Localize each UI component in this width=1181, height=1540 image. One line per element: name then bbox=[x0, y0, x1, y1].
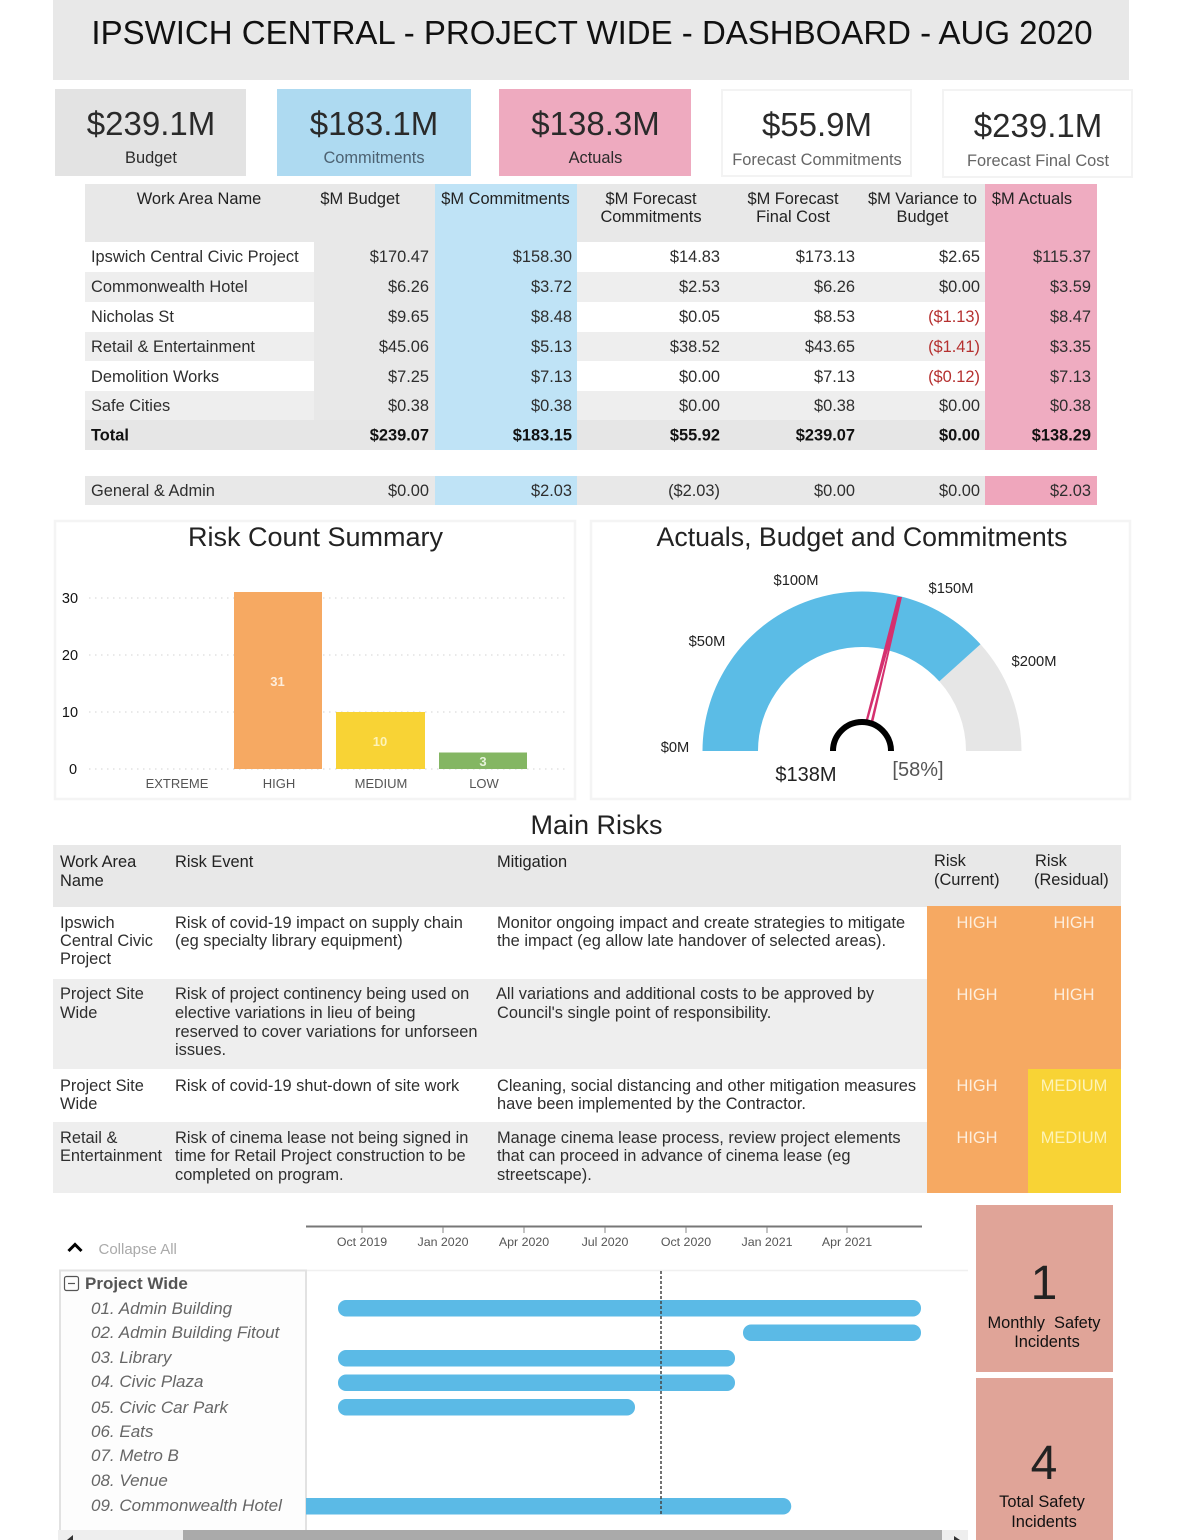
gantt task list: 08. Venue bbox=[91, 1471, 168, 1490]
panel: risk count summary bbox=[55, 521, 575, 799]
row: Ipswich Central Civic Project: $170.47 bbox=[370, 248, 429, 266]
gantt task list: Project Wide bbox=[85, 1274, 188, 1293]
KPI: actuals: $138.3M bbox=[531, 105, 660, 142]
safety tile: monthly incidents: Monthly Safety bbox=[988, 1314, 1101, 1332]
gantt task list: 09. Commonwealth Hotel bbox=[91, 1496, 283, 1515]
risk row 1 bbox=[60, 914, 1094, 968]
risk row 4 bbox=[60, 1129, 1107, 1184]
table header row: $M Actuals bbox=[992, 190, 1072, 208]
today marker bbox=[660, 1271, 662, 1516]
row: General and Admin: $2.03 bbox=[531, 482, 572, 500]
KPI: budget bbox=[55, 89, 246, 176]
row: Ipswich Central Civic Project bbox=[91, 248, 1091, 266]
row: Commonwealth Hotel: $3.59 bbox=[1050, 278, 1091, 296]
risk row 3: Risk of covid-19 shut-down of site work bbox=[175, 1077, 460, 1095]
row: Nicholas St: $0.05 bbox=[679, 308, 720, 326]
row: Commonwealth Hotel: $0.00 bbox=[939, 278, 980, 296]
row: Commonwealth Hotel: $3.72 bbox=[531, 278, 572, 296]
KPI: forecast final cost bbox=[943, 90, 1132, 177]
row: General and Admin bbox=[91, 482, 1091, 500]
row: Total: $239.07 bbox=[370, 426, 429, 444]
row: Total: Total bbox=[91, 426, 129, 444]
title banner: IPSWICH CENTRAL - PROJECT WIDE - DASHBOARD - AUG 2020 bbox=[91, 14, 1093, 51]
gantt timeline axis bbox=[306, 1226, 922, 1249]
risk row 1: HIGH bbox=[1054, 914, 1094, 932]
gantt timeline axis: Jan 2020 bbox=[418, 1235, 469, 1249]
table header row: Work Area Name bbox=[137, 190, 261, 208]
row: Retail and Entertainment: $3.35 bbox=[1050, 338, 1091, 356]
bar: high 31: 31 bbox=[270, 674, 285, 689]
risk row 2: Wide bbox=[60, 1004, 97, 1022]
cost table bbox=[85, 184, 1097, 505]
row: Total: $55.92 bbox=[670, 426, 720, 444]
gauge value: $138M bbox=[775, 764, 837, 786]
row: Commonwealth Hotel: $6.26 bbox=[814, 278, 855, 296]
row: General and Admin: $0.00 bbox=[814, 482, 855, 500]
risk row 4: HIGH bbox=[957, 1129, 997, 1147]
gantt task list: 02. Admin Building Fitout bbox=[91, 1323, 281, 1342]
risk row 4: time for Retail Project construction to be bbox=[175, 1147, 466, 1165]
y axis labels: 20 bbox=[62, 648, 78, 664]
risk row 1: Project bbox=[60, 950, 111, 968]
table header row: Budget bbox=[897, 208, 949, 226]
row: Total bbox=[91, 426, 1091, 444]
table header row: Final Cost bbox=[756, 208, 830, 226]
risk table header: (Current) bbox=[934, 871, 1000, 889]
row: Retail and Entertainment: Retail & Entertainment bbox=[91, 338, 255, 356]
KPI: forecast commitments: Forecast Commitments bbox=[732, 151, 902, 169]
risk row 3: Cleaning, social distancing and other mitigation measures bbox=[497, 1077, 916, 1095]
row: Retail and Entertainment: $45.06 bbox=[379, 338, 429, 356]
risk row 3: Project Site bbox=[60, 1077, 144, 1095]
row: Retail and Entertainment: ($1.41) bbox=[928, 338, 980, 356]
KPI: forecast final cost: $239.1M bbox=[974, 107, 1102, 144]
table header row: $M Budget bbox=[320, 190, 400, 208]
safety tile: monthly incidents bbox=[976, 1205, 1113, 1372]
category labels: MEDIUM bbox=[355, 776, 407, 791]
gantt chart bbox=[58, 1226, 968, 1540]
gantt timeline axis: Apr 2021 bbox=[822, 1235, 872, 1249]
row: Retail and Entertainment: $38.52 bbox=[670, 338, 720, 356]
bar: medium 10: 10 bbox=[373, 734, 387, 749]
table header row: $M Commitments bbox=[441, 190, 570, 208]
heading: gauge: Actuals, Budget and Commitments bbox=[657, 522, 1067, 552]
icon: minus box bbox=[64, 1276, 78, 1290]
risk row 2: HIGH bbox=[1054, 986, 1094, 1004]
KPI: actuals: Actuals bbox=[569, 149, 622, 167]
row: Demolition Works bbox=[91, 368, 1091, 386]
risk row 1: Monitor ongoing impact and create strategies to mitigate bbox=[497, 914, 905, 932]
risk row 2: HIGH bbox=[957, 986, 997, 1004]
risk row 1: (eg specialty library equipment) bbox=[175, 932, 403, 950]
risk table header: Risk bbox=[934, 852, 967, 870]
gauge scale labels: $100M bbox=[774, 573, 818, 589]
row: Commonwealth Hotel: Commonwealth Hotel bbox=[91, 278, 248, 296]
bar: low 3 bbox=[439, 752, 527, 769]
heading: risk count summary: Risk Count Summary bbox=[188, 522, 444, 552]
row: Nicholas St: ($1.13) bbox=[928, 308, 980, 326]
category labels: LOW bbox=[469, 776, 500, 791]
icon: collapse chevron bbox=[68, 1244, 82, 1251]
gauge scale labels: $50M bbox=[689, 634, 725, 650]
risk row 4: Retail & bbox=[60, 1129, 117, 1147]
gantt task list: 05. Civic Car Park bbox=[91, 1398, 229, 1417]
risk row 2: Risk of project continency being used on bbox=[175, 985, 469, 1003]
row: Demolition Works: $7.13 bbox=[814, 368, 855, 386]
y axis labels: 10 bbox=[62, 705, 78, 721]
category labels: EXTREME bbox=[146, 776, 209, 791]
row: Ipswich Central Civic Project: $115.37 bbox=[1033, 248, 1091, 266]
safety tile: monthly incidents: 1 bbox=[1031, 1257, 1057, 1310]
risk row 4: Entertainment bbox=[60, 1147, 162, 1165]
row: Ipswich Central Civic Project: $173.13 bbox=[796, 248, 855, 266]
gauge hub bbox=[833, 722, 891, 751]
risk row 1: Risk of covid-19 impact on supply chain bbox=[175, 914, 463, 932]
gantt task list: 03. Library bbox=[91, 1348, 173, 1367]
row: Retail and Entertainment: $5.13 bbox=[531, 338, 572, 356]
row: Ipswich Central Civic Project: $2.65 bbox=[939, 248, 980, 266]
risk row 2: issues. bbox=[175, 1041, 226, 1059]
row: Nicholas St: $8.47 bbox=[1050, 308, 1091, 326]
safety tile: total incidents: 4 bbox=[1031, 1437, 1057, 1490]
row: Demolition Works: ($0.12) bbox=[928, 368, 980, 386]
category labels: HIGH bbox=[263, 776, 295, 791]
gantt timeline axis: Apr 2020 bbox=[499, 1235, 549, 1249]
risk row 4: that can proceed in advance of cinema lease (eg bbox=[497, 1147, 851, 1165]
risk row 2: Project Site bbox=[60, 985, 144, 1003]
risk table header: Risk bbox=[1035, 852, 1068, 870]
risk table header: Name bbox=[60, 872, 104, 890]
risk row 4: MEDIUM bbox=[1041, 1129, 1107, 1147]
category labels bbox=[146, 776, 500, 791]
y axis labels: 0 bbox=[69, 762, 77, 778]
row: Total: $0.00 bbox=[939, 426, 980, 444]
gauge percent: [58%] bbox=[892, 759, 944, 781]
risk row 4: Manage cinema lease process, review project elements bbox=[497, 1129, 901, 1147]
table header row bbox=[137, 190, 1072, 226]
safety tile: total incidents: Total Safety bbox=[999, 1493, 1086, 1511]
row: Ipswich Central Civic Project: $158.30 bbox=[513, 248, 572, 266]
row: General and Admin: $0.00 bbox=[388, 482, 429, 500]
gantt timeline axis: Oct 2020 bbox=[661, 1235, 711, 1249]
risk table header: (Residual) bbox=[1034, 871, 1109, 889]
row: Total: $138.29 bbox=[1032, 426, 1091, 444]
risk row 4: completed on program. bbox=[175, 1166, 344, 1184]
row: Total: $239.07 bbox=[796, 426, 855, 444]
main risks table bbox=[53, 845, 1121, 1193]
row: Retail and Entertainment: $43.65 bbox=[805, 338, 855, 356]
row: Total: $183.15 bbox=[513, 426, 572, 444]
risk row 3: MEDIUM bbox=[1041, 1077, 1107, 1095]
row: Demolition Works: Demolition Works bbox=[91, 368, 219, 386]
row: Retail and Entertainment bbox=[91, 338, 1091, 356]
row: Nicholas St: $9.65 bbox=[388, 308, 429, 326]
gantt task list: 06. Eats bbox=[91, 1422, 154, 1441]
risk row 2: elective variations in lieu of being bbox=[175, 1004, 416, 1022]
gantt timeline axis: Jan 2021 bbox=[742, 1235, 793, 1249]
risk row 1: Central Civic bbox=[60, 932, 153, 950]
risk table header bbox=[60, 852, 1109, 890]
bar: high 31 bbox=[234, 592, 322, 769]
row: Demolition Works: $7.25 bbox=[388, 368, 429, 386]
gantt bars bbox=[306, 1300, 921, 1514]
risk row 3 bbox=[60, 1077, 1107, 1113]
row: Demolition Works: $7.13 bbox=[1050, 368, 1091, 386]
table header row: Commitments bbox=[600, 208, 702, 226]
risk table header: Mitigation bbox=[497, 853, 567, 871]
safety tile: total incidents bbox=[976, 1378, 1113, 1540]
gauge scale labels: $150M bbox=[929, 581, 973, 597]
row: General and Admin: General & Admin bbox=[91, 482, 215, 500]
risk row 1: Ipswich bbox=[60, 914, 115, 932]
row: Safe Cities: $0.38 bbox=[388, 397, 429, 415]
row: Commonwealth Hotel: $6.26 bbox=[388, 278, 429, 296]
y axis labels: 30 bbox=[62, 591, 78, 607]
gauge scale labels: $200M bbox=[1012, 654, 1056, 670]
gantt task list: 04. Civic Plaza bbox=[91, 1372, 203, 1391]
row: Safe Cities: $0.38 bbox=[531, 397, 572, 415]
row: Nicholas St: Nicholas St bbox=[91, 308, 174, 326]
risk row 2: reserved to cover variations for unforseen bbox=[175, 1023, 477, 1041]
risk row 2: Council's single point of responsibility. bbox=[497, 1004, 771, 1022]
risk row 2: All variations and additional costs to be approved by bbox=[496, 985, 875, 1003]
row: Nicholas St: $8.48 bbox=[531, 308, 572, 326]
KPI: actuals bbox=[499, 89, 691, 176]
row: Safe Cities: $0.00 bbox=[679, 397, 720, 415]
gantt scrollbar bbox=[58, 1530, 968, 1540]
collapse all label: Collapse All bbox=[98, 1241, 177, 1258]
table header row: $M Forecast bbox=[605, 190, 697, 208]
gauge arc bbox=[702, 592, 1022, 751]
row: General and Admin: $0.00 bbox=[939, 482, 980, 500]
row: Commonwealth Hotel bbox=[91, 278, 1091, 296]
risk row 3: have been implemented by the Contractor. bbox=[497, 1095, 806, 1113]
gauge needle bbox=[866, 597, 902, 721]
row: Ipswich Central Civic Project: Ipswich Central Civic Project bbox=[91, 248, 299, 266]
risk row 1: the impact (eg allow late handover of selected areas). bbox=[497, 932, 886, 950]
panel: actuals, budget and commitments gauge bbox=[591, 521, 1130, 799]
row: Safe Cities: $0.38 bbox=[814, 397, 855, 415]
row: General and Admin: $2.03 bbox=[1050, 482, 1091, 500]
row: Demolition Works: $0.00 bbox=[679, 368, 720, 386]
KPI: commitments: Commitments bbox=[323, 149, 425, 167]
title banner bbox=[53, 0, 1129, 80]
heading: main risks: Main Risks bbox=[530, 810, 663, 840]
gantt timeline axis: Oct 2019 bbox=[337, 1235, 387, 1249]
gauge scale labels bbox=[661, 573, 1056, 756]
row: Ipswich Central Civic Project: $14.83 bbox=[670, 248, 720, 266]
gantt task list: 07. Metro B bbox=[91, 1446, 179, 1465]
risk row 3: HIGH bbox=[957, 1077, 997, 1095]
risk table header: Work Area bbox=[60, 853, 137, 871]
KPI: commitments: $183.1M bbox=[310, 105, 438, 142]
table header row: $M Variance to bbox=[868, 190, 977, 208]
gantt timeline axis: Jul 2020 bbox=[582, 1235, 629, 1249]
safety tile: monthly incidents: Incidents bbox=[1014, 1333, 1080, 1351]
row: Nicholas St bbox=[91, 308, 1091, 326]
table header row: $M Forecast bbox=[747, 190, 839, 208]
risk row 3: Wide bbox=[60, 1095, 97, 1113]
KPI: forecast commitments bbox=[722, 90, 911, 176]
gantt task list bbox=[60, 1270, 306, 1535]
row: Commonwealth Hotel: $2.53 bbox=[679, 278, 720, 296]
row: Safe Cities: Safe Cities bbox=[91, 397, 170, 415]
row: Safe Cities bbox=[91, 397, 1091, 415]
row: Demolition Works: $7.13 bbox=[531, 368, 572, 386]
row: Safe Cities: $0.00 bbox=[939, 397, 980, 415]
KPI: forecast final cost: Forecast Final Cost bbox=[967, 152, 1109, 170]
gauge scale labels: $0M bbox=[661, 740, 689, 756]
risk row 4: streetscape). bbox=[497, 1166, 592, 1184]
risk table header: Risk Event bbox=[175, 853, 254, 871]
row: Safe Cities: $0.38 bbox=[1050, 397, 1091, 415]
bar: medium 10 bbox=[336, 712, 425, 769]
gantt task list: 01. Admin Building bbox=[91, 1299, 233, 1318]
risk row 2 bbox=[60, 985, 1094, 1059]
y axis labels bbox=[62, 591, 78, 778]
KPI: commitments bbox=[277, 89, 471, 176]
KPI: budget: Budget bbox=[125, 149, 177, 167]
row: General and Admin: ($2.03) bbox=[668, 482, 720, 500]
risk row 1: HIGH bbox=[957, 914, 997, 932]
KPI: budget: $239.1M bbox=[87, 105, 215, 142]
KPI: forecast commitments: $55.9M bbox=[762, 106, 872, 143]
row: Nicholas St: $8.53 bbox=[814, 308, 855, 326]
bar: low 3: 3 bbox=[479, 754, 487, 769]
safety tile: total incidents: Incidents bbox=[1011, 1513, 1077, 1531]
risk row 4: Risk of cinema lease not being signed in bbox=[175, 1129, 468, 1147]
